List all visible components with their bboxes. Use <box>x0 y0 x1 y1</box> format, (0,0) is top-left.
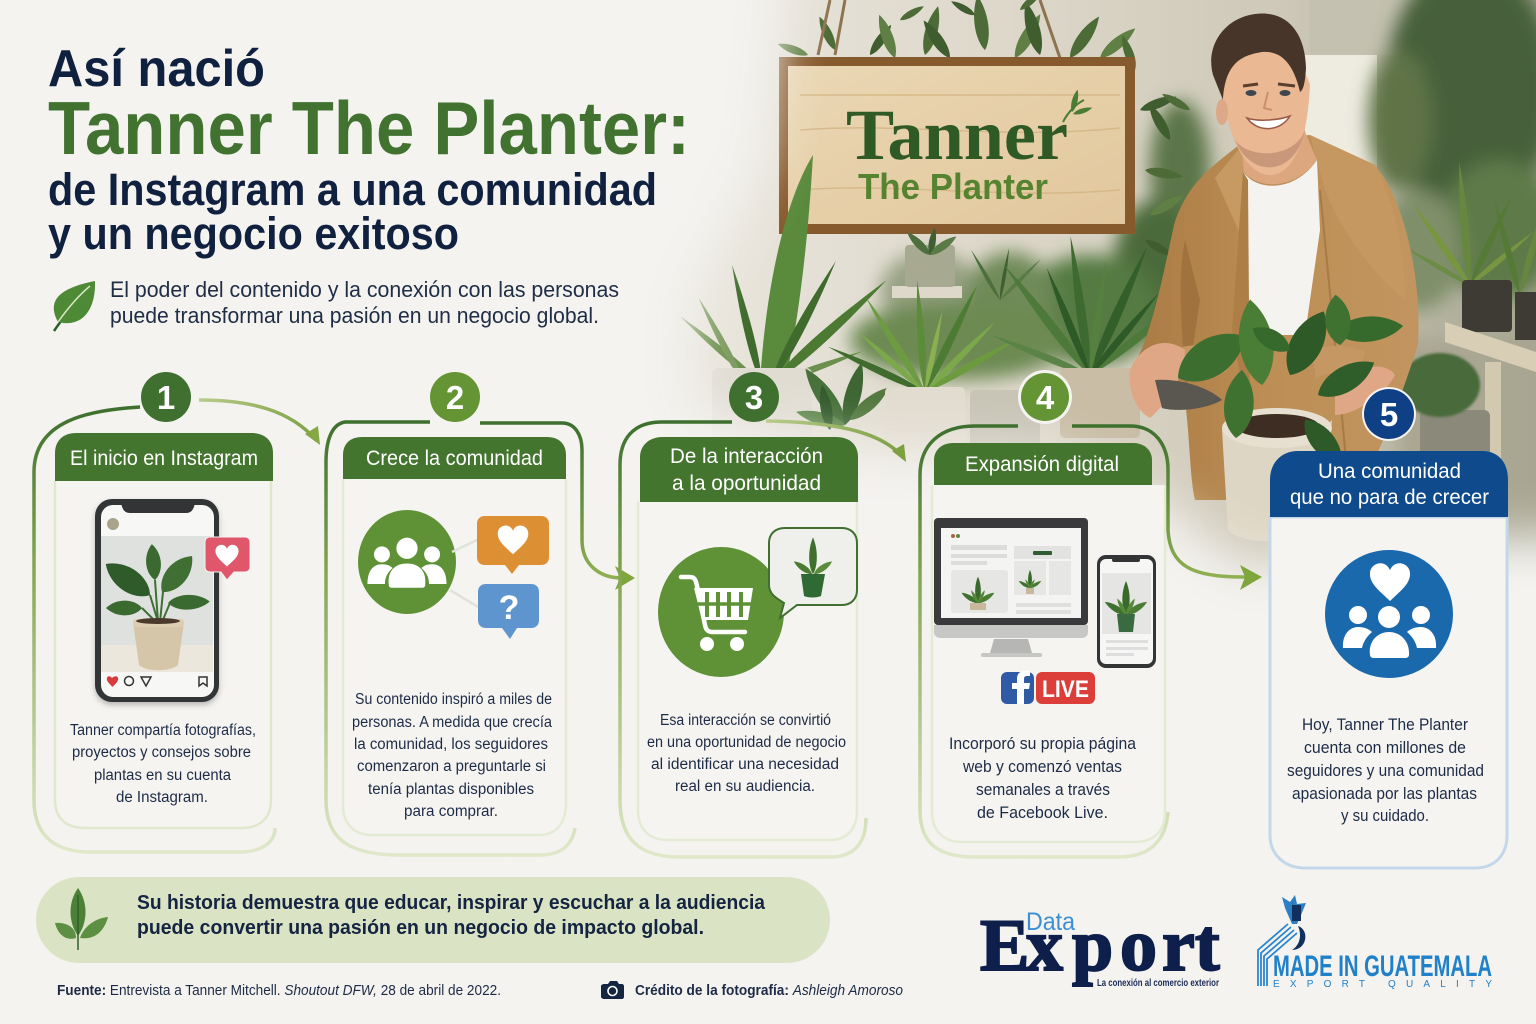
panel 3 text: real en su audiencia. <box>675 778 815 795</box>
sign: The Planter <box>858 166 1048 207</box>
icon: question bubble <box>478 584 539 639</box>
panel 1: El inicio en Instagram <box>34 407 275 852</box>
logo: Data Export: La conexión al comercio exterior <box>1097 978 1219 989</box>
panel 1 text: de Instagram. <box>116 789 208 806</box>
panel 5 text: cuenta con millones de <box>1304 739 1466 757</box>
step number 4 <box>1018 370 1072 424</box>
icon: community circle <box>358 510 478 614</box>
step number 3 <box>729 372 779 422</box>
panel 5 header: que no para de crecer <box>1290 486 1489 509</box>
panel 4 text: Incorporó su propia página <box>949 734 1137 753</box>
hands <box>1130 343 1185 418</box>
panel 2 text: Su contenido inspiró a miles de <box>355 691 552 708</box>
icon: heart bubble <box>205 537 250 580</box>
panel 4 text: web y comenzó ventas <box>962 757 1122 776</box>
step number 5 <box>1362 387 1416 441</box>
subtitle line two: y un negocio exitoso <box>48 208 459 259</box>
panel 4: Expansión digital <box>920 426 1168 857</box>
step number 2 <box>428 370 482 424</box>
logo: Made in Guatemala: EXPORT QUALITY <box>1273 979 1492 990</box>
photo credit: Crédito de la fotografía: Ashleigh Amoroso <box>635 983 903 999</box>
trowel <box>1155 380 1222 410</box>
banner text: Su historia demuestra que educar, inspirar y escuchar a la audiencia <box>137 892 766 914</box>
panel 3 header: a la oportunidad <box>672 472 821 495</box>
panel 3 text: en una oportunidad de negocio <box>647 734 846 751</box>
panel 2 header: Crece la comunidad <box>366 447 543 470</box>
title line: Tanner The Planter: Tanner The Planter: <box>48 86 690 170</box>
held pot <box>1222 420 1332 541</box>
panel 5 text: seguidores y una comunidad <box>1287 762 1484 780</box>
mid plants <box>795 235 1190 431</box>
icon: Facebook Live badge <box>1001 671 1095 704</box>
panel 5 header <box>1270 451 1508 517</box>
banner text <box>137 892 766 939</box>
man <box>1130 13 1419 500</box>
icon: plant bubble <box>769 528 857 618</box>
intro text: El poder del contenido y la conexión con las personas <box>110 277 619 302</box>
step number 1: 1 <box>157 379 175 416</box>
panel 2 text <box>352 691 552 820</box>
panel 2 text: la comunidad, los seguidores <box>354 736 548 753</box>
intro text <box>110 277 619 328</box>
step number 1 <box>141 372 191 422</box>
title line: Así nació: Así nació <box>48 40 265 98</box>
panel 2 header <box>343 437 566 479</box>
panel 2: Crece la comunidad <box>326 422 575 855</box>
icon: phone with plant post <box>95 499 250 702</box>
sign text: Tanner <box>846 95 1068 175</box>
conclusion banner <box>36 877 830 963</box>
panel 2 text: tenía plantas disponibles <box>368 781 534 798</box>
shirt <box>1243 160 1320 335</box>
face details <box>1243 84 1295 86</box>
step number 5: 5 <box>1380 396 1398 433</box>
arrow 4 to 5 <box>1072 426 1262 590</box>
panel 4 text: de Facebook Live. <box>977 803 1108 822</box>
panel 5 header: Una comunidad <box>1318 460 1461 483</box>
icon: shopping cart circle <box>658 547 784 677</box>
step number 4: 4 <box>1036 379 1055 416</box>
banner text: puede convertir una pasión en un negocio de impacto global. <box>137 917 704 939</box>
panel 1 text: Tanner compartía fotografías, <box>70 722 256 739</box>
title <box>48 40 690 259</box>
right side shelf and pots <box>1402 162 1536 458</box>
panel 1 text <box>70 722 256 806</box>
hanging foliage above sign <box>776 0 1192 260</box>
jacket <box>1130 135 1419 500</box>
pockets <box>1181 345 1226 372</box>
panel 2 text: para comprar. <box>404 803 498 820</box>
panel 5 text: Hoy, Tanner The Planter <box>1302 716 1468 734</box>
panel 1 header <box>55 433 273 481</box>
icon: question bubble: ? <box>499 589 519 627</box>
step number 2: 2 <box>446 379 464 416</box>
held plant leaves <box>1178 294 1403 451</box>
panel 3 text: Esa interacción se convirtió <box>660 712 831 729</box>
plants under sign, back row <box>892 227 1042 301</box>
arrow 3 to 4 <box>766 421 906 462</box>
panel 3 header: De la interacción <box>670 445 823 468</box>
neck <box>1242 130 1317 184</box>
panel 1 text: proyectos y consejos sobre <box>72 744 251 761</box>
panel 4 text <box>949 734 1137 822</box>
logo: Data Export: Data <box>1026 908 1075 936</box>
icon: leaf <box>54 281 95 331</box>
big spear plant <box>677 155 890 389</box>
panel 5: Una comunidad que no para de crecer <box>1270 451 1508 868</box>
subtitle line one: de Instagram a una comunidad <box>48 164 657 215</box>
icon: Facebook Live badge: LIVE <box>1042 676 1089 703</box>
icon: community with heart <box>1325 550 1453 678</box>
panel 3: De la interacción a la oportunidad <box>620 422 866 857</box>
panel 1 text: plantas en su cuenta <box>94 767 231 784</box>
logo: Made in Guatemala <box>1258 895 1492 990</box>
icon: heart bubble <box>477 516 549 574</box>
intro text: puede transformar una pasión en un negocio global. <box>110 303 599 328</box>
photo: Tanner in his plant shop with wooden sign <box>640 0 1536 620</box>
icon: monitor with shop page <box>934 518 1088 657</box>
sign <box>779 57 1135 234</box>
panel 4 header: Expansión digital <box>965 453 1119 476</box>
icon: camera <box>601 981 624 999</box>
panel 4 header <box>934 443 1152 485</box>
logo: Data Export: Export <box>980 905 1220 987</box>
head <box>1222 51 1310 175</box>
panel 5 text: y su cuidado. <box>1341 807 1429 825</box>
sign leaf sprig <box>1063 89 1093 122</box>
panel 1 header: El inicio en Instagram <box>70 447 258 470</box>
step number 3: 3 <box>745 379 763 416</box>
panel 2 text: personas. A medida que crecía <box>352 714 552 731</box>
arrow 1 to 2 <box>199 400 320 445</box>
panel 5 text: apasionada por las plantas <box>1292 785 1477 803</box>
icon: sprig <box>55 888 108 950</box>
panel 3 text <box>647 712 846 795</box>
arrow 2 to 3 <box>480 423 635 590</box>
panel 4 text: semanales a través <box>976 780 1110 799</box>
panel 5 text <box>1287 716 1484 825</box>
panel 3 header <box>640 437 858 502</box>
icon: phone <box>1097 555 1156 668</box>
panel 2 text: comenzaron a preguntarle si <box>357 758 546 775</box>
source footer: Fuente: Entrevista a Tanner Mitchell. Shoutout DFW, 28 de abril de 2022. <box>57 983 501 999</box>
panel 3 text: al identificar una necesidad <box>651 756 839 773</box>
